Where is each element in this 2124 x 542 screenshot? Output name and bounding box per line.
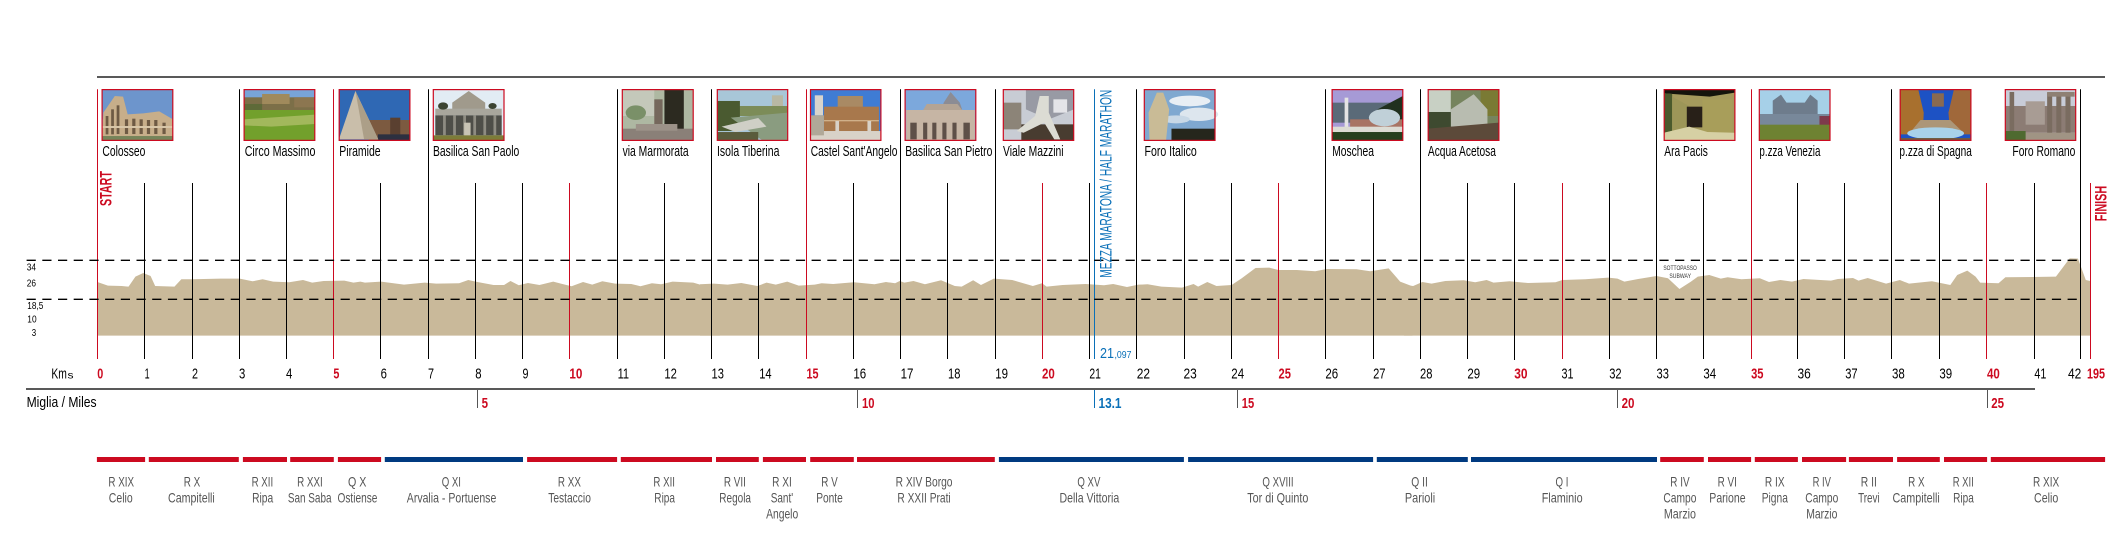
kilometre numbers: 19	[995, 366, 1008, 382]
kilometre numbers: 15	[806, 366, 818, 382]
kilometre numbers: 29	[1467, 366, 1480, 382]
district names: Q XV	[1077, 474, 1101, 490]
district names: R X	[184, 474, 201, 490]
kilometre numbers: 31	[1562, 366, 1574, 382]
photo: Ara Pacis	[1664, 90, 1734, 140]
district names: R IX	[1765, 474, 1785, 490]
photo: Acqua Acetosa	[1428, 90, 1498, 140]
district names: Marzio	[1664, 506, 1696, 522]
landmark names: Moschea	[1332, 144, 1374, 160]
district names: Testaccio	[548, 490, 591, 506]
kilometre numbers: 4	[286, 366, 292, 382]
kilometre numbers: 11	[618, 366, 629, 382]
kilometre numbers: 38	[1892, 366, 1905, 382]
kilometre numbers: 6	[381, 366, 387, 382]
district names: San Saba	[288, 490, 332, 506]
kilometre numbers: 28	[1420, 366, 1432, 382]
district names: Ripa	[654, 490, 675, 506]
district names: R XII	[252, 474, 273, 490]
mile markers	[478, 390, 2004, 412]
kilometre numbers: 34	[1703, 366, 1716, 382]
district names: Ripa	[252, 490, 273, 506]
landmark names: Castel Sant'Angelo	[811, 144, 898, 160]
kilometre numbers: 23	[1184, 366, 1197, 382]
landmark names: Foro Romano	[2012, 144, 2075, 160]
photo: p.zza di Spagna	[1900, 90, 1970, 140]
kilometre numbers: 36	[1798, 366, 1811, 382]
kilometre numbers: 7	[428, 366, 434, 382]
half marathon distance	[1100, 346, 1132, 362]
kilometre numbers: 39	[1939, 366, 1952, 382]
elevation profile	[97, 258, 2090, 336]
district names: R XXI	[297, 474, 323, 490]
district names: Campo	[1805, 490, 1838, 506]
kilometre numbers: 42	[2068, 366, 2081, 382]
elevation scale labels: 10	[27, 314, 37, 325]
kilometre numbers	[97, 366, 2105, 382]
kilometre numbers: 1	[145, 366, 150, 382]
kilometre numbers: 33	[1656, 366, 1669, 382]
FINISH label: FINISH	[2092, 186, 2110, 221]
photo: Viale Mazzini	[1004, 90, 1074, 140]
landmark names: Basilica San Pietro	[905, 144, 992, 160]
photo: Moschea	[1332, 90, 1402, 140]
kilometre numbers: 26	[1325, 366, 1338, 382]
photo: Isola Tiberina	[718, 90, 788, 140]
district names: R X	[1908, 474, 1925, 490]
district names: Q XVIII	[1262, 474, 1294, 490]
district names: R XI	[772, 474, 792, 490]
half marathon distance: 21	[1100, 346, 1114, 362]
landmark names: Colosseo	[102, 144, 145, 160]
kilometre numbers: 17	[901, 366, 913, 382]
kilometre numbers: 10	[569, 366, 582, 382]
district names: Ponte	[816, 490, 843, 506]
kilometre numbers: 13	[712, 366, 724, 382]
district names: Pigna	[1762, 490, 1788, 506]
kilometre numbers: 32	[1609, 366, 1622, 382]
district names: Campo	[1663, 490, 1697, 506]
kilometre numbers: 195	[2087, 366, 2105, 382]
landmark names: p.zza di Spagna	[1899, 144, 1972, 160]
district names: Angelo	[766, 506, 798, 522]
district names: R VI	[1718, 474, 1737, 490]
district names: R II	[1861, 474, 1877, 490]
district names: R XII	[653, 474, 675, 490]
district names: R XIX	[108, 474, 135, 490]
landmark names: p.zza Venezia	[1759, 144, 1820, 160]
landmark names: Piramide	[339, 144, 381, 160]
district names: Trevi	[1858, 490, 1880, 506]
mile markers: 13.1	[1098, 396, 1122, 412]
district names: Celio	[109, 490, 133, 506]
kilometre axis title: s	[68, 370, 74, 381]
kilometre numbers: 12	[664, 366, 677, 382]
photo: via Marmorata	[622, 90, 693, 140]
district names: R VII	[724, 474, 746, 490]
photo: Basilica San Paolo	[434, 90, 504, 140]
landmark names: Viale Mazzini	[1003, 144, 1064, 160]
kilometre numbers: 21	[1089, 366, 1101, 382]
kilometre numbers: 27	[1373, 366, 1386, 382]
subway note: SOTTOPASSO	[1663, 265, 1697, 272]
kilometre numbers: 3	[239, 366, 245, 382]
kilometre tick lines	[98, 89, 2090, 360]
district names: R V	[821, 474, 838, 490]
landmark names: via Marmorata	[623, 144, 689, 160]
kilometre numbers: 20	[1042, 366, 1055, 382]
photo: Circo Massimo	[244, 90, 314, 140]
photo: Foro Italico	[1144, 90, 1218, 140]
kilometre numbers: 5	[333, 366, 339, 382]
landmark names: Isola Tiberina	[717, 144, 779, 160]
kilometre numbers: 8	[475, 366, 482, 382]
subway note: SUBWAY	[1669, 273, 1692, 280]
kilometre numbers: 41	[2034, 366, 2046, 382]
district names: Q XI	[442, 474, 461, 490]
landmark names: Acqua Acetosa	[1428, 144, 1496, 160]
START label: START	[98, 171, 116, 206]
district names	[108, 474, 2060, 522]
landmark names: Ara Pacis	[1664, 144, 1708, 160]
district names: Sant'	[771, 490, 793, 506]
district names: Ripa	[1953, 490, 1974, 506]
photo: Foro Romano	[2006, 90, 2076, 140]
elevation scale labels: 18,5	[27, 301, 44, 312]
mile markers: 15	[1242, 396, 1254, 412]
kilometre numbers: 18	[948, 366, 960, 382]
district names: Celio	[2034, 490, 2058, 506]
axis rule	[26, 388, 2035, 390]
district names: Parioli	[1405, 490, 1435, 506]
district names: R XXII Prati	[897, 490, 951, 506]
district names: R XII	[1953, 474, 1974, 490]
mile markers: 5	[482, 396, 488, 412]
top rule	[97, 76, 2105, 78]
kilometre numbers: 14	[759, 366, 772, 382]
district names: Della Vittoria	[1060, 490, 1119, 506]
district names: Regola	[719, 490, 751, 506]
kilometre numbers: 30	[1514, 366, 1528, 382]
photo: Castel Sant'Angelo	[811, 90, 880, 140]
photo: p.zza Venezia	[1760, 90, 1830, 140]
district names: Ostiense	[338, 490, 378, 506]
district names: Arvalia - Portuense	[407, 490, 496, 506]
district names: Q I	[1556, 474, 1568, 490]
district names: Parione	[1709, 490, 1746, 506]
photo: Basilica San Pietro	[906, 90, 976, 140]
kilometre numbers: 22	[1137, 366, 1150, 382]
kilometre numbers: 24	[1231, 366, 1244, 382]
district names: R IV	[1813, 474, 1831, 490]
kilometre numbers: 25	[1278, 366, 1291, 382]
miles axis title: Miglia / Miles	[27, 395, 97, 411]
district names: R XX	[558, 474, 581, 490]
district bars	[97, 457, 2105, 462]
mile markers: 20	[1622, 396, 1634, 412]
kilometre numbers: 0	[97, 366, 103, 382]
dashed elevation guide lines	[27, 260, 2080, 299]
kilometre numbers: 35	[1751, 366, 1764, 382]
mile markers: 25	[1991, 396, 2004, 412]
photo: Piramide	[340, 90, 410, 140]
district names: R XIV Borgo	[896, 474, 953, 490]
elevation scale labels: 3	[32, 328, 37, 339]
landmark names: Basilica San Paolo	[433, 144, 519, 160]
landmark names	[102, 144, 2075, 160]
elevation scale labels	[27, 263, 44, 339]
mile markers: 10	[862, 396, 874, 412]
photo frames	[102, 90, 2076, 140]
elevation scale labels: 34	[27, 263, 36, 274]
district names: Campitelli	[168, 490, 215, 506]
kilometre axis title: Km	[51, 366, 67, 382]
kilometre numbers: 16	[853, 366, 866, 382]
district names: Q X	[348, 474, 367, 490]
elevation scale labels: 26	[27, 279, 36, 290]
district names: Campitelli	[1892, 490, 1940, 506]
half marathon distance: ,097	[1114, 350, 1132, 361]
subway note	[1663, 265, 1697, 280]
photo: Colosseo	[102, 90, 172, 140]
district names: Tor di Quinto	[1247, 490, 1309, 506]
kilometre numbers: 9	[522, 366, 528, 382]
district names: Flaminio	[1542, 490, 1583, 506]
landmark names: Foro Italico	[1144, 144, 1197, 160]
district names: R IV	[1670, 474, 1690, 490]
landmark names: Circo Massimo	[245, 144, 315, 160]
district names: Marzio	[1806, 506, 1838, 522]
district names: R XIX	[2033, 474, 2060, 490]
kilometre numbers: 2	[192, 366, 198, 382]
district names: Q II	[1411, 474, 1428, 490]
kilometre numbers: 40	[1987, 366, 2000, 382]
kilometre numbers: 37	[1845, 366, 1858, 382]
